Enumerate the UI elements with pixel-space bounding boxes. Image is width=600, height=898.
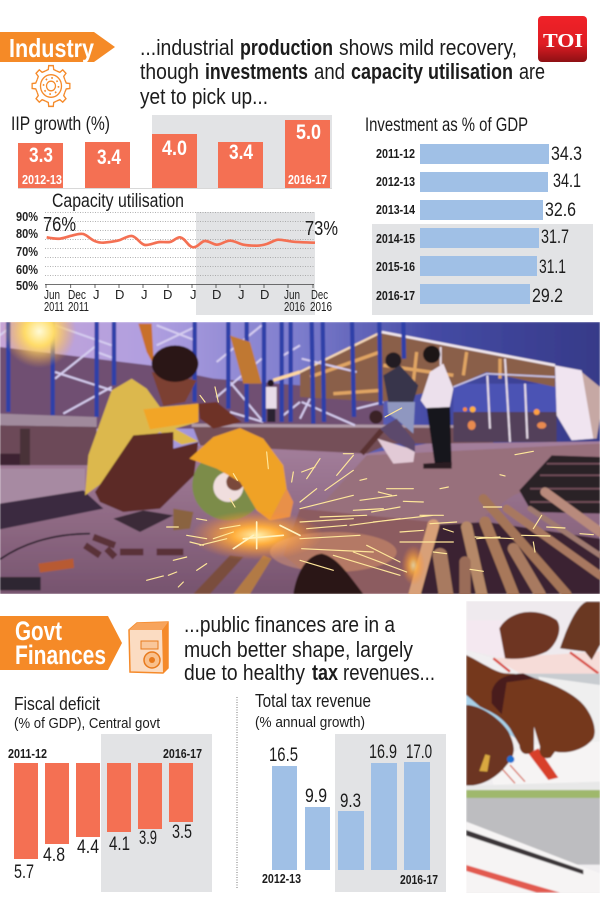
bar chart: total tax revenue: [255, 691, 446, 892]
line chart: capacity utilisation: 2011: [44, 299, 64, 314]
bar chart: total tax revenue: 16.9: [369, 742, 397, 763]
small distant person: [267, 380, 274, 386]
scaffolding: [0, 325, 383, 425]
bar chart: investment as percent of GDP: 34.1: [553, 171, 581, 192]
heading: capacity utilisation: Capacity utilisation: [52, 191, 184, 212]
line chart: capacity utilisation: 90%: [16, 209, 38, 224]
bar chart: investment as percent of GDP: 2016-17: [376, 288, 415, 303]
line chart: capacity utilisation: D: [115, 287, 124, 302]
bar chart: fiscal deficit: 3.5: [172, 822, 192, 843]
bar chart: IIP growth: 3.4: [229, 141, 253, 164]
stacked pipes: [410, 522, 600, 594]
line chart: capacity utilisation: 76%: [43, 214, 76, 236]
line chart: capacity utilisation: J: [141, 287, 148, 302]
intro text: revenues...: [343, 660, 435, 685]
bar chart: total tax revenue: 17.0: [406, 742, 432, 763]
intro text: ...public finances are in a: [184, 612, 396, 637]
bar chart: IIP growth: 3.3: [29, 144, 53, 167]
bar chart: IIP growth: 4.0: [162, 137, 187, 160]
ground: [0, 441, 600, 594]
saw: [192, 462, 256, 521]
bar chart: total tax revenue: 9.9: [305, 786, 327, 807]
line chart: capacity utilisation: J: [190, 287, 196, 302]
bar chart: IIP growth: 2016-17: [288, 172, 327, 187]
bar chart: investment as percent of GDP: 31.1: [539, 257, 566, 278]
intro text: [184, 612, 435, 685]
bar chart: fiscal deficit: 5.7: [14, 862, 34, 883]
intro text: [140, 35, 545, 109]
dark steel grid: [519, 455, 600, 514]
crouching man: [377, 439, 415, 464]
tag: Govt Finances: Govt: [15, 616, 62, 646]
panel: govt finances header: [0, 612, 435, 685]
line chart: capacity utilisation: 70%: [16, 244, 38, 259]
bar chart: fiscal deficit: 3.9: [139, 828, 157, 849]
bar chart: fiscal deficit: [8, 694, 212, 892]
bar chart: investment as percent of GDP: 2015-16: [376, 259, 415, 274]
bar chart: total tax revenue: 16.5: [269, 745, 298, 766]
photo: hands filling in tax forms: [466, 601, 600, 894]
bar chart: total tax revenue: 9.3: [340, 791, 361, 812]
bar chart: fiscal deficit: 2011-12: [8, 746, 47, 761]
sparks: [147, 387, 593, 587]
subheading: percent of GDP: (% of GDP), Central govt: [14, 715, 161, 732]
line chart: capacity utilisation: J: [93, 287, 100, 302]
bar chart: investment as percent of GDP: 2012-13: [376, 174, 415, 189]
icon: safe: [129, 622, 168, 673]
bar chart: fiscal deficit: 2016-17: [163, 746, 202, 761]
bar chart: investment as percent of GDP: [365, 115, 593, 315]
bar chart: IIP growth: 3.4: [97, 146, 121, 169]
line chart: capacity utilisation: 73%: [305, 218, 338, 240]
background wall: [0, 347, 383, 429]
tent: [300, 332, 555, 402]
intro text: though: [140, 59, 199, 84]
glass wall behind tent: [453, 384, 557, 414]
line chart: capacity utilisation: Dec: [311, 287, 328, 302]
heading: investment: Investment as % of GDP: [365, 115, 528, 136]
heading: IIP growth: IIP growth (%): [11, 114, 110, 135]
line chart: capacity utilisation: 2011: [68, 299, 89, 314]
bar chart: investment as percent of GDP: 34.3: [551, 144, 582, 165]
logo: TOI: [538, 16, 587, 62]
spark glow: [193, 512, 319, 559]
bar chart: IIP growth: 2012-13: [22, 172, 62, 187]
line chart: capacity utilisation: D: [212, 287, 221, 302]
panel: industry header: [0, 16, 587, 109]
intro text: yet to pick up...: [140, 84, 268, 109]
heading: total tax revenue: Total tax revenue: [255, 691, 371, 711]
line chart: capacity utilisation: D: [163, 287, 172, 302]
intro text: and: [314, 59, 345, 84]
line chart: capacity utilisation: Jun: [284, 287, 300, 302]
heading: fiscal deficit: Fiscal deficit: [14, 694, 100, 714]
intro text: production: [240, 35, 333, 60]
bar chart: fiscal deficit: 4.8: [43, 845, 65, 866]
line chart: capacity utilisation: 2016: [284, 299, 305, 314]
line chart: capacity utilisation: 80%: [16, 226, 38, 241]
bar chart: investment as percent of GDP: 31.7: [541, 227, 569, 248]
line chart: capacity utilisation: D: [260, 287, 269, 302]
line chart: capacity utilisation: 2016: [310, 299, 332, 314]
bar chart: total tax revenue: 2016-17: [400, 872, 438, 887]
intro text: much better shape, largely: [184, 637, 413, 662]
bar chart: IIP growth: 5.0: [296, 121, 321, 144]
intro text: investments: [205, 59, 308, 84]
intro text: capacity utilisation: [351, 59, 513, 84]
bar chart: investment as percent of GDP: 2011-12: [376, 146, 415, 161]
intro text: due to healthy: [184, 660, 305, 685]
tag: Govt Finances: Finances: [15, 640, 106, 670]
worker: [85, 379, 198, 495]
subheading: annual growth: (% annual growth): [255, 714, 365, 731]
line chart: capacity utilisation: 60%: [16, 262, 38, 277]
photo: worker cutting metal with sparks: [0, 322, 600, 594]
logo: TOI: TOI: [543, 30, 583, 52]
bar chart: investment as percent of GDP: 32.6: [545, 200, 576, 221]
bar chart: investment as percent of GDP: 2014-15: [376, 231, 415, 246]
foreground rods: [193, 555, 243, 594]
bar chart: total tax revenue: 2012-13: [262, 871, 301, 886]
line chart: capacity utilisation: Dec: [68, 287, 86, 302]
bar chart: IIP growth: [11, 114, 332, 189]
tag: Industry: Industry: [9, 33, 94, 63]
tag: Govt Finances: [0, 616, 122, 670]
icon: gear: [32, 66, 70, 106]
line chart: capacity utilisation: J: [238, 287, 244, 302]
line chart: capacity utilisation: [16, 191, 338, 315]
bar chart: investment as percent of GDP: 29.2: [532, 286, 563, 307]
intro text: shows mild recovery,: [339, 35, 517, 60]
bar chart: investment as percent of GDP: 2013-14: [376, 202, 416, 217]
standing men: [385, 352, 401, 368]
intro text: ...industrial: [140, 35, 234, 60]
intro text: are: [519, 59, 545, 84]
bar chart: fiscal deficit: 4.4: [77, 837, 99, 858]
bar chart: fiscal deficit: 4.1: [109, 834, 130, 855]
tools and bricks on ground: [173, 509, 193, 530]
intro text: tax: [312, 660, 339, 685]
line chart: capacity utilisation: 50%: [16, 278, 38, 293]
foreground dark sack: [293, 554, 363, 594]
line chart: capacity utilisation: Jun: [44, 287, 60, 302]
